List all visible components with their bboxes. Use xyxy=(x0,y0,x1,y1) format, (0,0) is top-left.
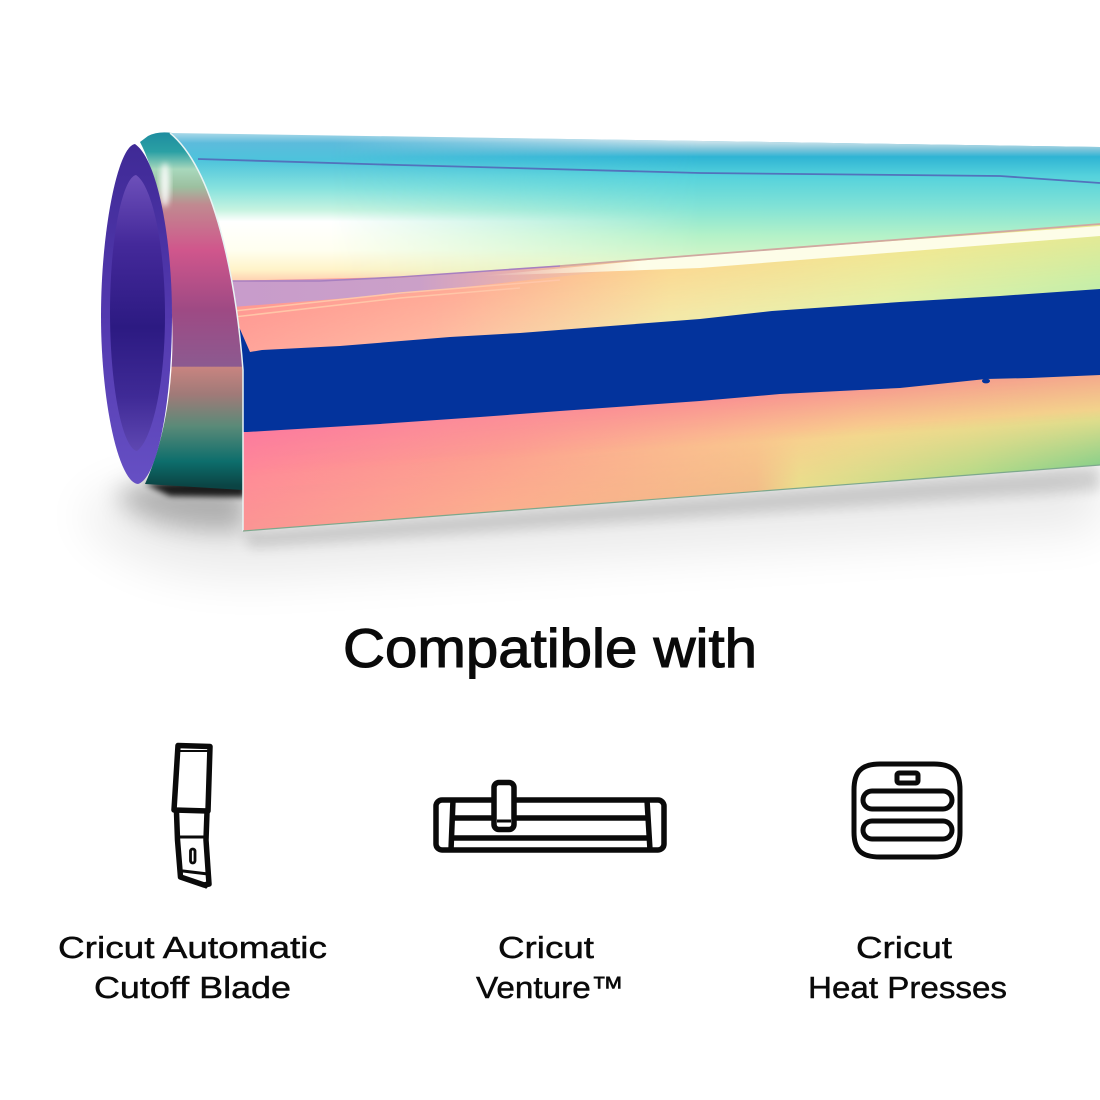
icon: heat press xyxy=(854,764,960,857)
label: Venture: Venture™ xyxy=(476,970,624,1005)
thin blue crease xyxy=(198,159,1100,183)
sheet edge highlight xyxy=(170,133,243,531)
label: heat presses: Cricut xyxy=(856,930,952,965)
item: Cricut Automatic Cutoff Blade xyxy=(58,746,327,1005)
label: heat presses: Heat Presses xyxy=(808,970,1007,1005)
label: heat presses xyxy=(808,930,1007,1005)
label: Venture xyxy=(476,930,624,1005)
floor shadow xyxy=(80,450,1100,577)
iridescent vinyl roll xyxy=(101,130,1100,535)
lavender crease xyxy=(232,264,598,307)
heading: Compatible with xyxy=(343,617,757,679)
label: Venture: Cricut xyxy=(498,930,594,965)
purple core end xyxy=(101,144,172,484)
sheet upper colours xyxy=(150,130,1100,535)
sheet middle colours xyxy=(237,224,1100,330)
sheet lower colours xyxy=(244,378,1100,520)
label: blade: Cutoff Blade xyxy=(94,970,291,1005)
sheet bottom edge xyxy=(243,465,1100,531)
label: blade xyxy=(58,930,327,1005)
cream strip xyxy=(480,226,1100,276)
item: Cricut Venture xyxy=(436,782,664,1005)
icon: cutoff blade xyxy=(174,746,210,887)
label: blade: Cricut Automatic xyxy=(58,930,327,965)
icon: Venture machine xyxy=(436,782,664,850)
roll side band xyxy=(140,132,243,490)
band glint xyxy=(160,163,170,207)
item: Cricut Heat Presses xyxy=(808,764,1007,1005)
dark notch on blue stripe xyxy=(982,379,990,383)
